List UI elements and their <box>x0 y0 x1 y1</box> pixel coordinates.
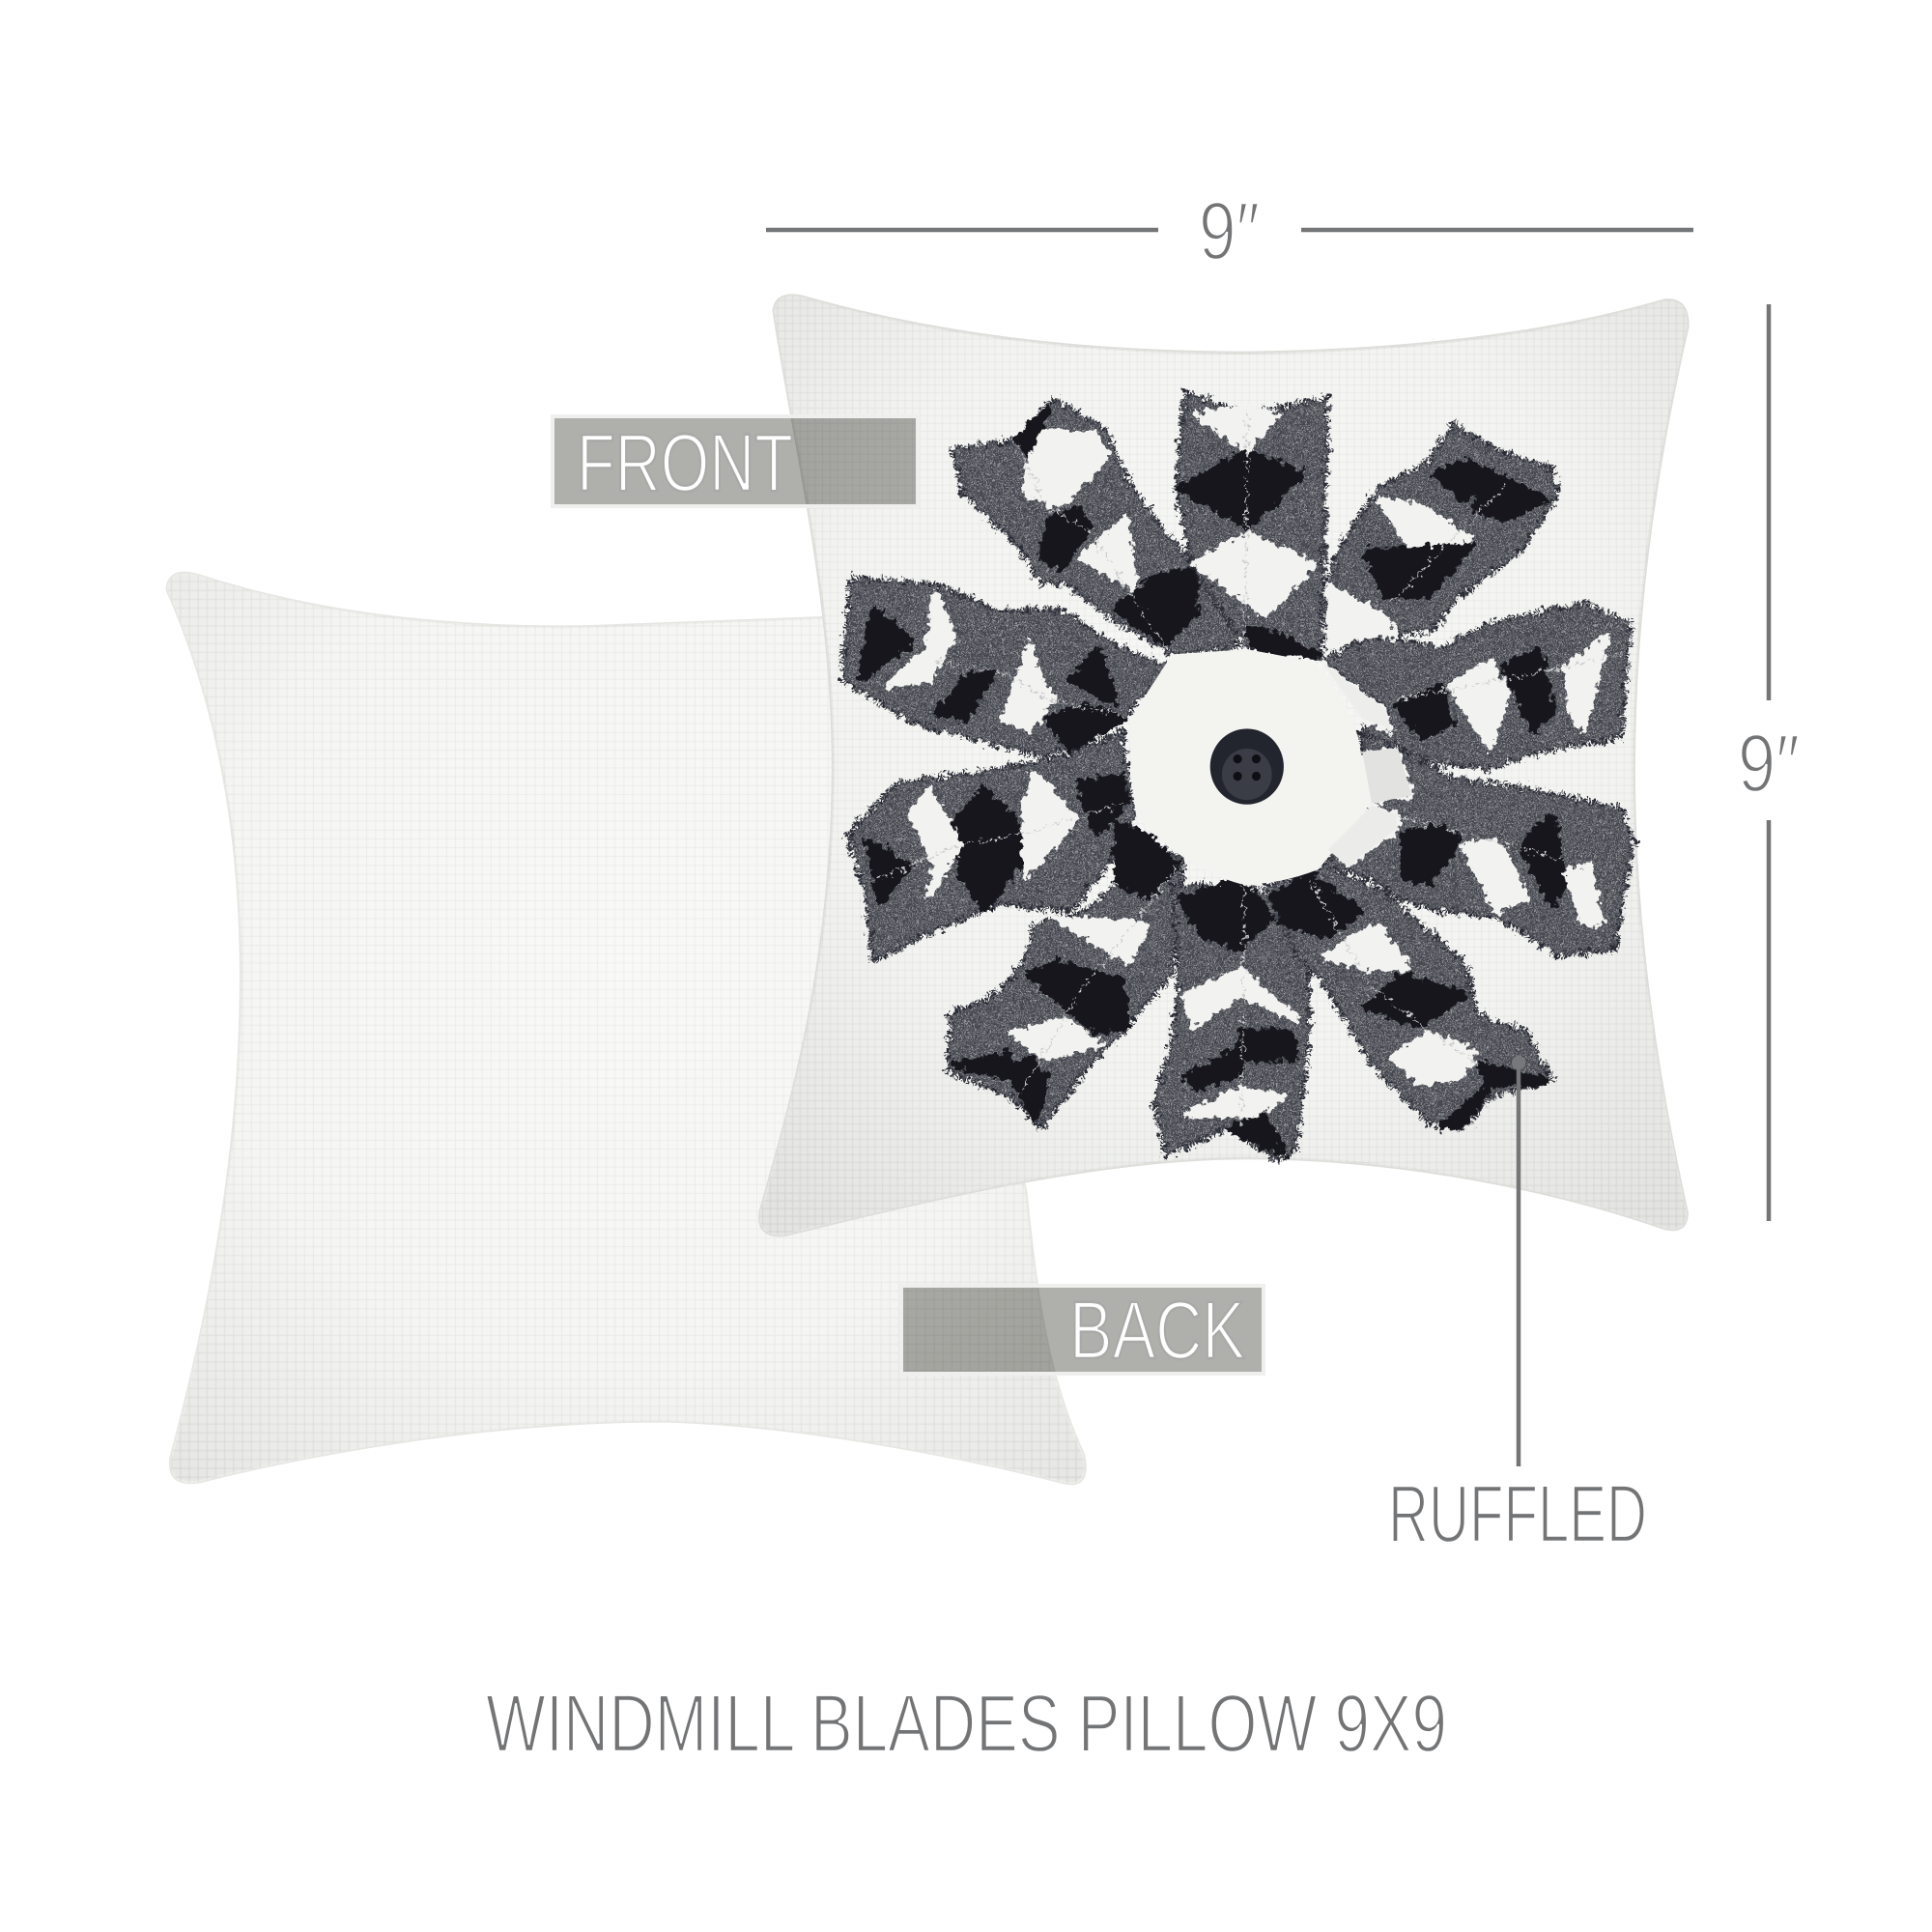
back pillow <box>167 573 1085 1484</box>
flower applique <box>841 391 1634 1161</box>
callout: ruffled <box>1388 1056 1647 1559</box>
petal: lower right <box>1265 867 1552 1129</box>
petal: left lower <box>847 731 1135 962</box>
flower centre <box>1129 649 1372 884</box>
petal: top <box>1176 391 1328 656</box>
label: FRONT: FRONT <box>577 417 793 508</box>
title: WINDMILL BLADES PILLOW 9X9 <box>486 1678 1447 1769</box>
petal: lower left <box>948 821 1184 1129</box>
label: BACK <box>901 1285 1264 1376</box>
front pillow <box>760 296 1688 1236</box>
petal: left upper <box>841 578 1172 757</box>
petal: top right <box>1325 423 1559 648</box>
petal: top left <box>951 398 1240 654</box>
label: BACK: BACK <box>1069 1285 1245 1376</box>
petal: right upper <box>1321 603 1631 770</box>
waffle texture <box>760 296 1688 1236</box>
pillow body <box>760 296 1688 1236</box>
height dimension: 9″ <box>1738 718 1800 809</box>
width dimension: 9″ <box>1199 185 1260 276</box>
petal: right lower <box>1321 731 1634 955</box>
callout: ruffled: RUFFLED <box>1388 1468 1647 1559</box>
centre petal tips <box>1321 662 1411 867</box>
button <box>1210 728 1284 805</box>
petal: bottom <box>1153 880 1309 1161</box>
